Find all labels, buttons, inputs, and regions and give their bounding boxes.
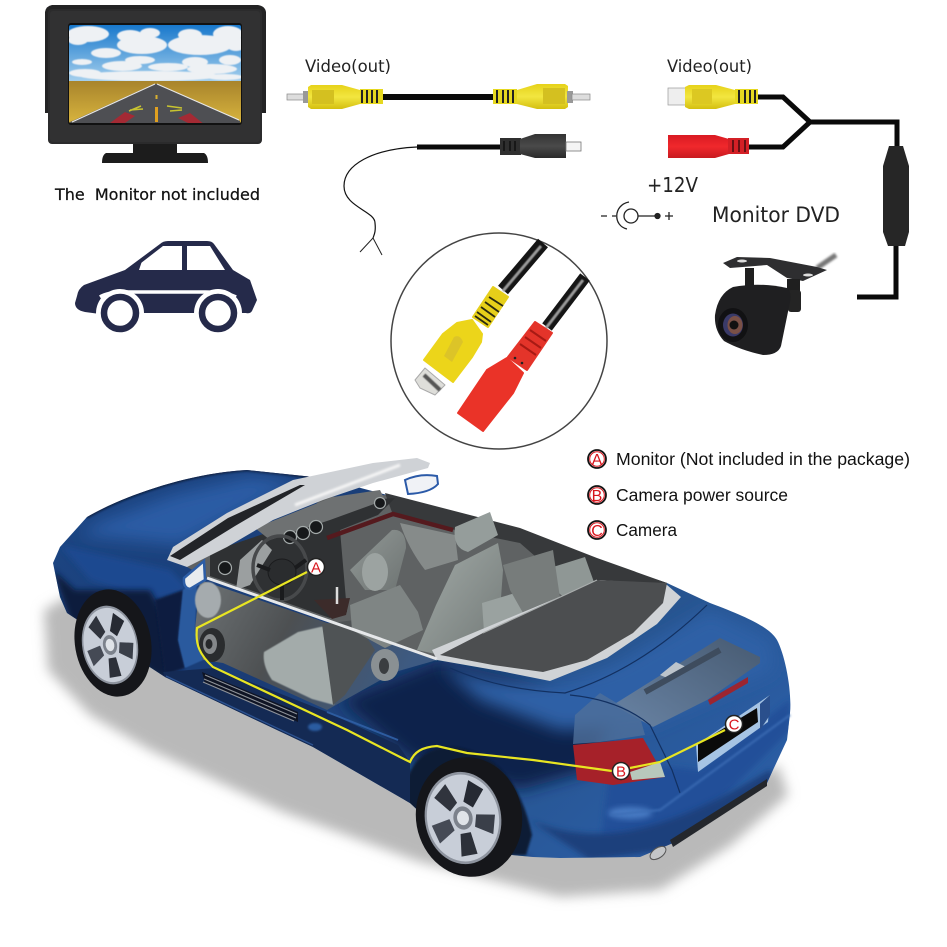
gear shift: [314, 587, 350, 619]
driver seat: [417, 512, 503, 655]
wheel well bulge: [195, 582, 221, 618]
red plug: [458, 322, 552, 431]
label: video out left: Video(out): [305, 57, 391, 76]
legend item A: Monitor (Not included in the package): [616, 449, 910, 469]
panel: monitor: [45, 5, 266, 163]
legend: [588, 449, 910, 540]
yellow camera cable: [197, 572, 725, 771]
rear seats: [482, 550, 595, 633]
camera lens: [718, 308, 748, 342]
far side mirror: [405, 475, 438, 494]
door cutaway: [195, 580, 437, 710]
caption: monitor not included: The Monitor not included: [54, 185, 260, 204]
legend item B: Camera power source: [616, 485, 788, 505]
legend item C: [588, 520, 677, 540]
marker A: [308, 558, 324, 576]
cable: camera harness with inline box: [668, 85, 909, 297]
ground shadow: [44, 590, 788, 897]
instrument cluster: [236, 540, 272, 590]
car: convertible cutaway illustration: [44, 458, 790, 897]
car body: [53, 470, 790, 860]
label: Monitor DVD: Monitor DVD: [712, 203, 840, 227]
dashboard: [210, 498, 395, 618]
icon: rear view camera: [715, 255, 836, 355]
red female connector: [668, 135, 749, 158]
trunk shut line: [450, 605, 707, 793]
legend item C: C: [591, 523, 603, 540]
quarter glass: [573, 693, 645, 744]
label: +12V: +12V: [647, 173, 698, 197]
dash top: [255, 490, 385, 540]
legend item A: A: [592, 452, 603, 469]
interior: [187, 495, 667, 660]
number plate: [696, 695, 770, 772]
tail light: [573, 738, 665, 785]
door sill line: [207, 578, 437, 659]
front wheel: [66, 583, 160, 703]
door speaker rear: [371, 649, 399, 681]
yellow female connector: [668, 85, 758, 109]
far door panel: [400, 523, 458, 570]
legend item C: Camera: [616, 520, 677, 540]
bumper crease highlight: [610, 715, 790, 815]
legend item B: B: [592, 488, 602, 505]
rear wheel: [406, 749, 532, 885]
near side mirror: [184, 561, 205, 589]
monitor stand: [102, 144, 208, 163]
marker B: [612, 762, 630, 780]
seat back in door view: [322, 620, 375, 705]
steering wheel: [253, 536, 307, 600]
windshield frame: [167, 458, 430, 567]
cable: yellow video cable: [287, 84, 590, 109]
tonneau cover: [440, 580, 667, 672]
front seat in door view: [264, 625, 334, 705]
trunk glass: [613, 638, 760, 727]
exhaust tip: [648, 844, 668, 862]
rear bumper strip: [670, 779, 767, 847]
marker C: [726, 716, 742, 734]
tonneau trim silver: [432, 580, 681, 681]
passenger seat: [350, 530, 423, 648]
high level brake light: [708, 677, 748, 705]
marker C: C: [729, 716, 740, 734]
door sill: [163, 668, 410, 803]
yellow plug: [415, 287, 508, 395]
marker A: A: [311, 560, 321, 576]
wood trim: [327, 514, 453, 538]
inline box: [883, 146, 909, 246]
marker B: B: [616, 764, 626, 780]
screen image: sky, clouds and road: [67, 25, 246, 125]
speaker: [199, 628, 225, 662]
vents: [218, 498, 386, 574]
icon: DC power jack symbol: [601, 202, 673, 229]
icon: car silhouette: [75, 241, 257, 337]
callout circle: RCA connector close-up: [391, 233, 607, 449]
cable: black power trigger lead: [344, 134, 581, 255]
far side body rail: [385, 493, 667, 590]
label: video out right: Video(out): [667, 57, 752, 76]
